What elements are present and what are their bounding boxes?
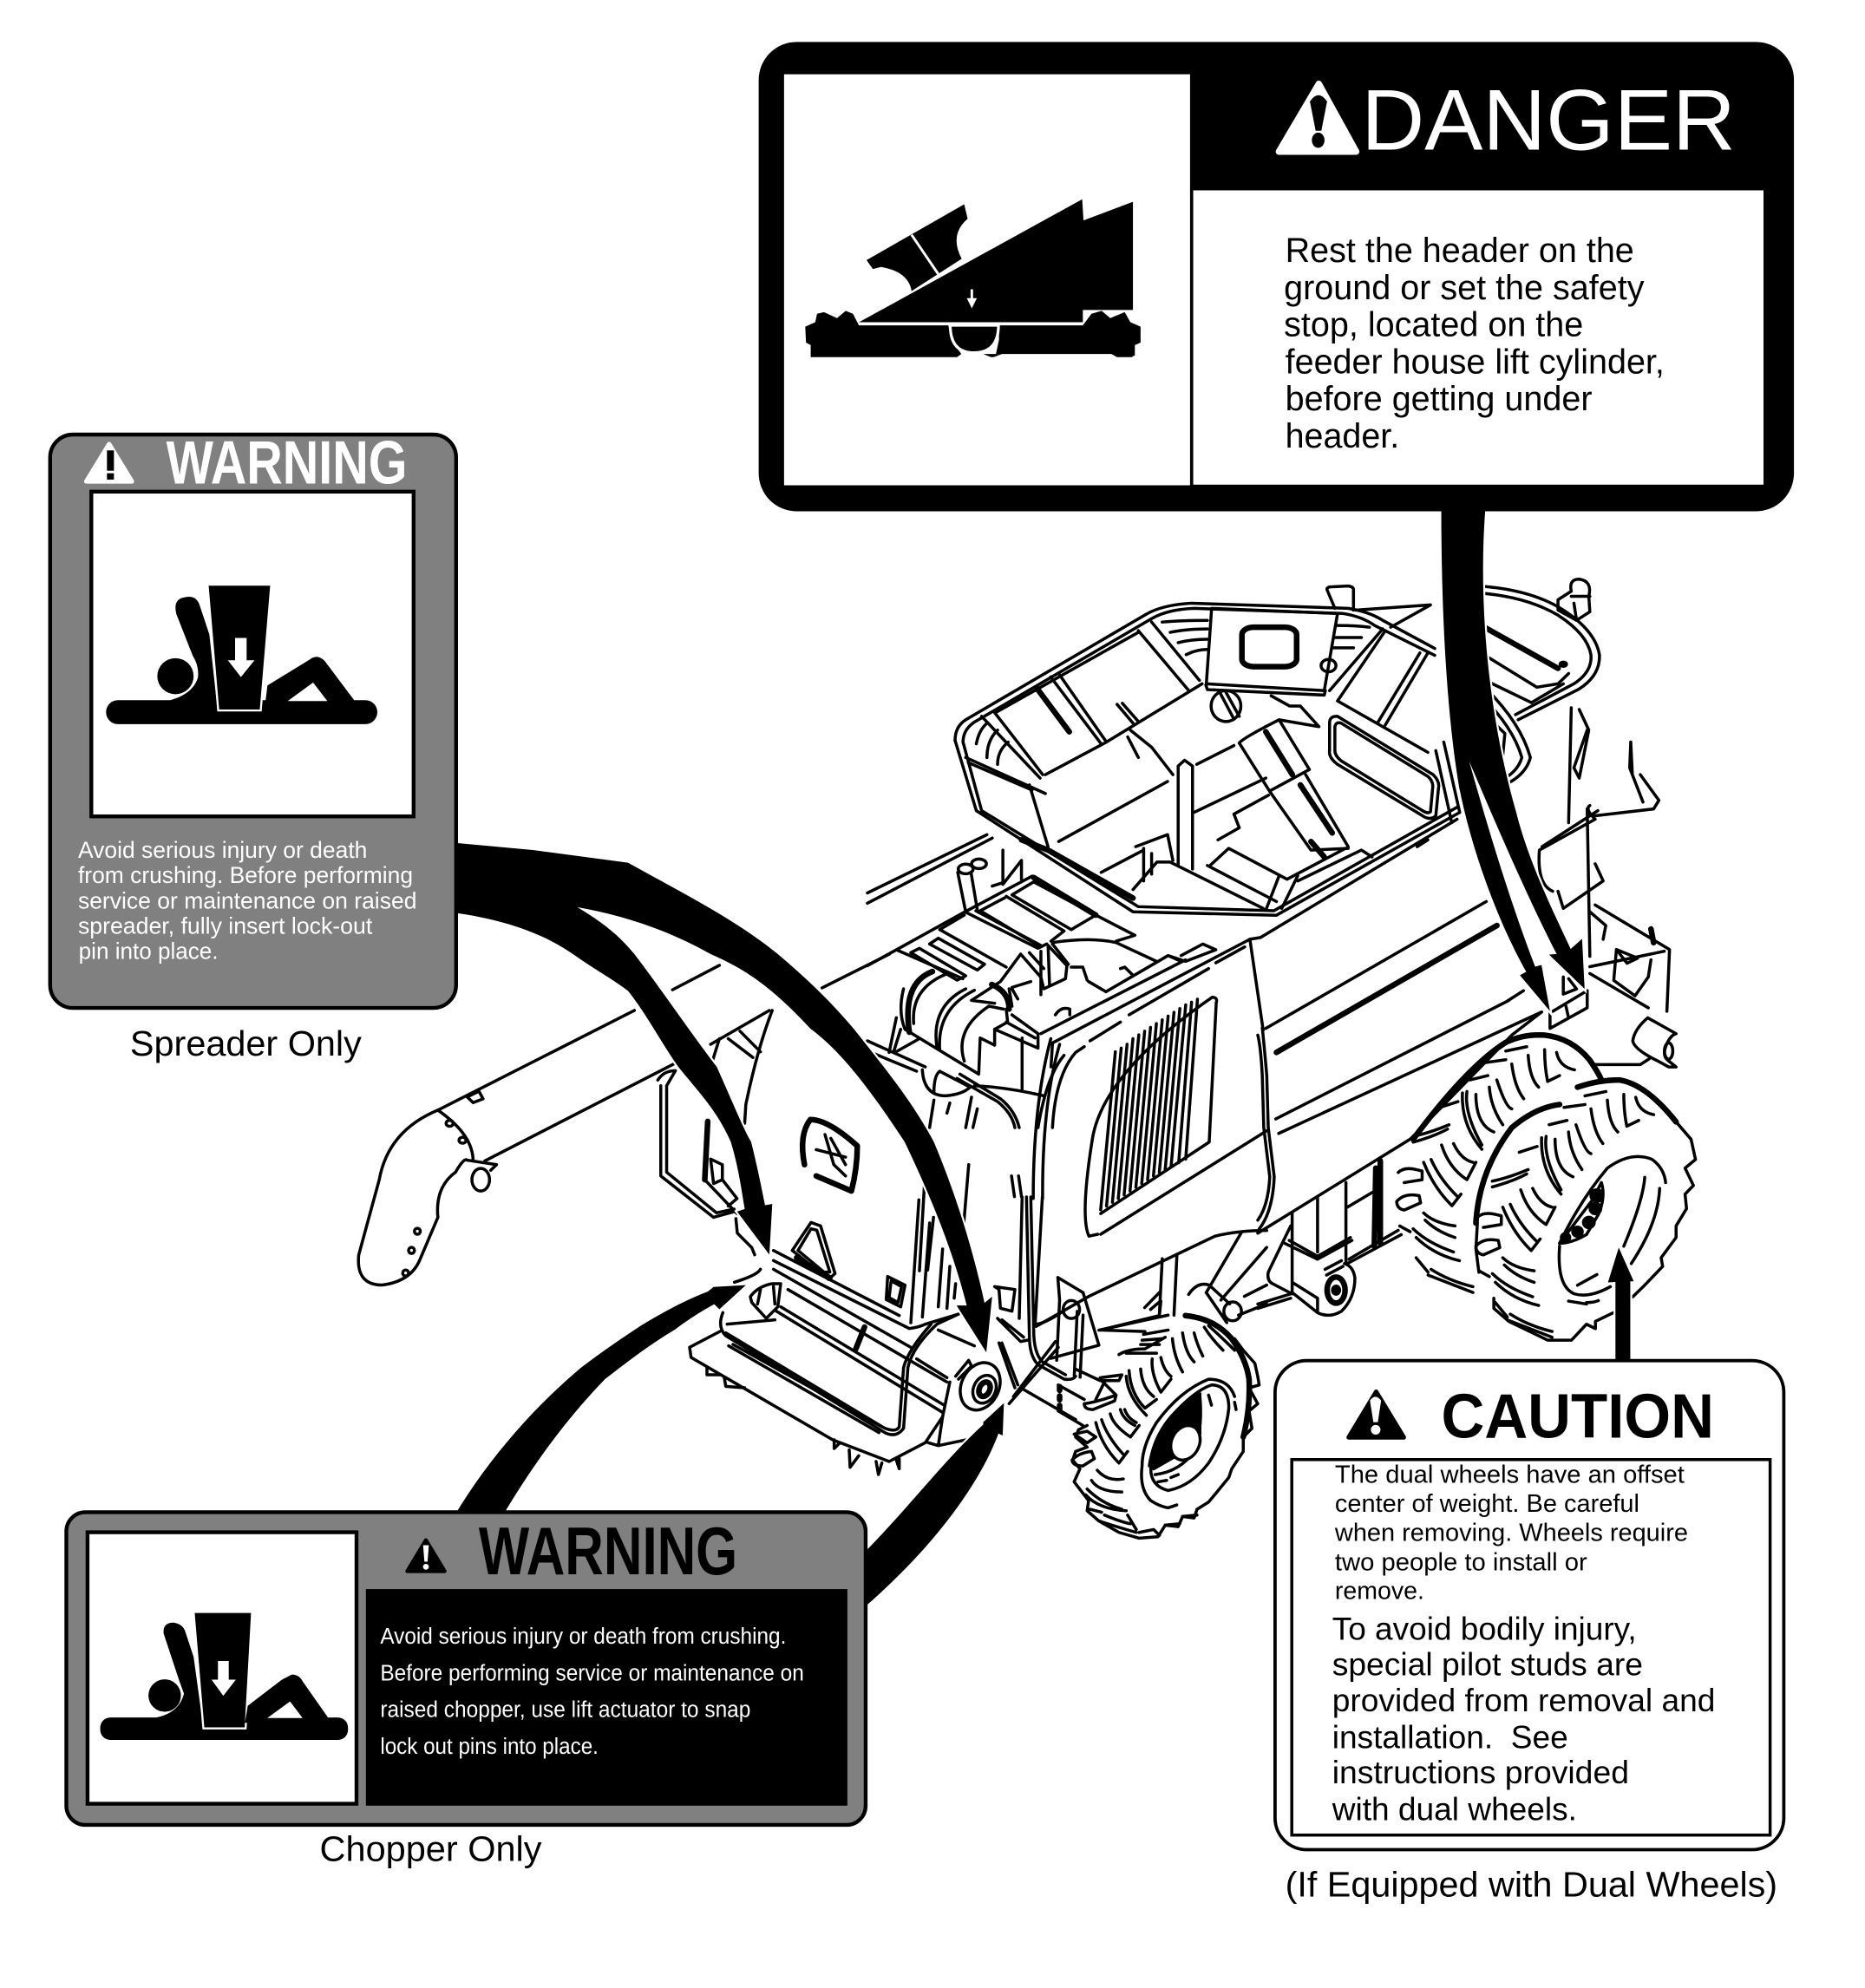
chopper warning text: raised chopper, use lift actuator to snap [380,1696,750,1722]
machine rotor, rear platform, warning triangle and pivot hub [690,1197,1076,1475]
chopper warning text: Avoid serious injury or death from crushing. [380,1623,786,1649]
machine illustration: combine line drawing [358,579,1696,1538]
danger pictogram: raised header over person [805,199,1141,357]
caution weight notice: center of weight. Be careful [1335,1490,1639,1518]
caution weight notice: when removing. Wheels require [1334,1520,1688,1547]
caution pilot stud instructions [1332,1611,1715,1828]
caution frame [1275,1361,1783,1850]
danger instructions: ground or set the safety [1284,268,1645,307]
caution weight notice: remove. [1335,1578,1424,1605]
arrow: chopper warning to right pin [863,1403,1004,1609]
danger instructions: Rest the header on the [1286,231,1634,270]
danger instructions [1284,231,1665,455]
spreader warning text: Avoid serious injury or death [78,837,367,863]
chopper warning text: lock out pins into place. [380,1733,599,1759]
arrow: danger decal to feeder house [1441,505,1585,1011]
caution pilot stud instructions: instructions provided [1332,1754,1629,1790]
chopper warning text [380,1623,804,1759]
chopper warning title: WARNING [479,1514,737,1589]
caution weight notice [1334,1462,1688,1605]
icon: danger triangle [1279,84,1357,152]
machine lower-left section: chute, spreader hood, logo and cab [358,954,1266,1409]
panel: caution decal [1275,1361,1783,1850]
danger instructions: stop, located on the [1284,305,1583,344]
spreader warning text: pin into place. [79,938,219,964]
arrow: caution decal to dual wheel [1608,1247,1633,1363]
caution pilot stud instructions: special pilot studs are [1332,1646,1643,1683]
danger frame [759,42,1794,511]
arrow: spreader warning to rear lock-out pins [450,842,992,1352]
crush pictogram: chopper [101,1612,348,1740]
danger pictogram panel [784,75,1190,486]
machine engine deck, air cleaner and hood [867,876,1249,1128]
caption: Spreader Only: Spreader Only [130,1023,362,1063]
spreader warning text: service or maintenance on raised [78,887,416,913]
panel: danger decal [759,42,1794,511]
danger title: DANGER [1361,73,1736,169]
panel: spreader warning decal [50,428,456,1008]
danger text panel [1194,190,1764,485]
caution pilot stud instructions: installation. See [1332,1719,1568,1756]
danger instructions: header. [1286,416,1399,455]
icon: warning triangle [86,444,132,481]
spreader frame [50,435,456,1008]
caution title: CAUTION [1441,1382,1714,1452]
icon: warning triangle [407,1540,445,1571]
icon: caution triangle [1349,1392,1404,1437]
spreader warning text: from crushing. Before performing [78,862,413,888]
caption: If Equipped with Dual Wheels: (If Equipped with Dual Wheels) [1286,1865,1777,1905]
front wheel [1058,1301,1260,1538]
danger instructions: before getting under [1286,379,1593,418]
caution pilot stud instructions: provided from removal and [1332,1682,1715,1718]
arrow: chopper warning to left pin [455,1285,746,1516]
crush pictogram: spreader [106,585,377,724]
machine right section: dual rear wheels and axle bracket [1258,1000,1696,1340]
caution weight notice: two people to install or [1335,1548,1587,1576]
chopper pictogram box [88,1533,357,1804]
spreader warning title: WARNING [167,428,407,496]
panel: chopper warning decal [66,1512,866,1825]
chopper warning text: Before performing service or maintenance on [380,1659,804,1685]
spreader pictogram box [91,492,414,816]
caution weight notice: The dual wheels have an offset [1335,1462,1685,1489]
caption: Chopper Only: Chopper Only [320,1829,542,1869]
caution pilot stud instructions: To avoid bodily injury, [1332,1611,1637,1647]
chopper frame [66,1512,866,1825]
danger instructions: feeder house lift cylinder, [1286,342,1665,381]
chopper text panel [366,1589,847,1806]
machine upper section: grain tank and rear platform [867,579,1670,1052]
spreader warning text [78,837,416,964]
caution text box [1292,1460,1770,1835]
spreader warning text: spreader, fully insert lock-out [78,913,373,939]
caution pilot stud instructions: with dual wheels. [1332,1791,1577,1828]
